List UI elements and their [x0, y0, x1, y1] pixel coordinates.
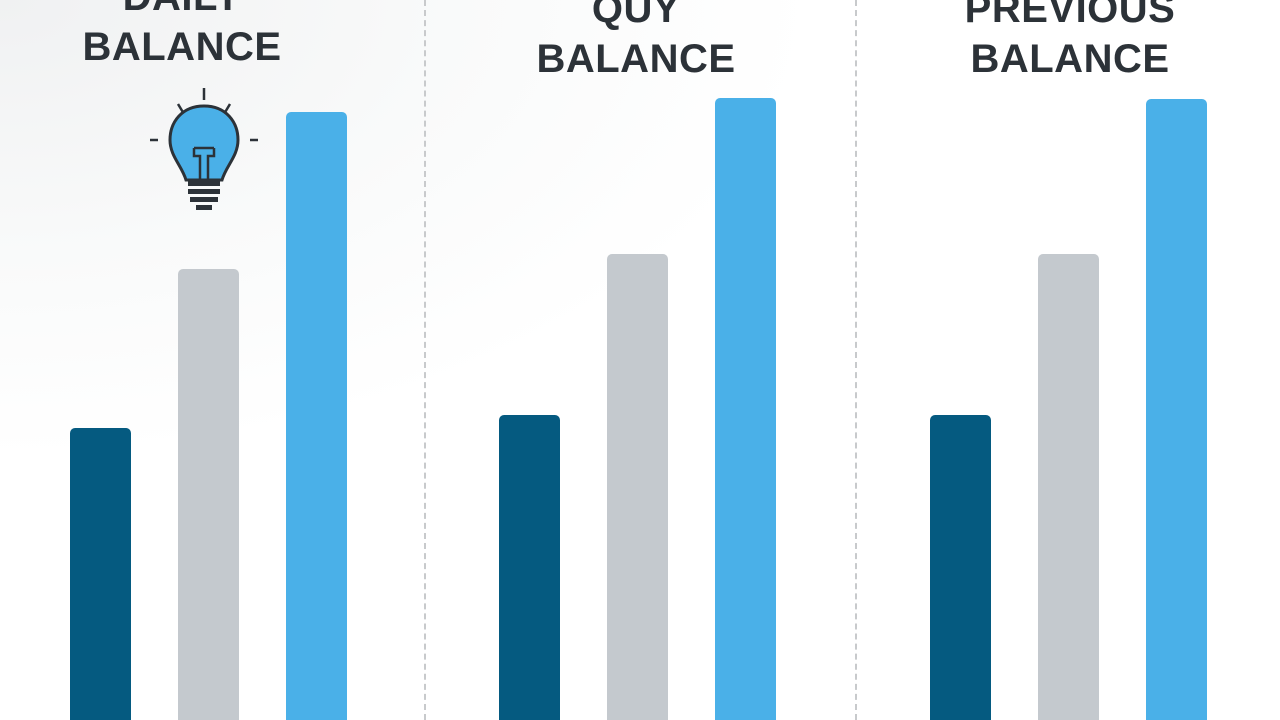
title: quy balance	[536, 0, 736, 81]
title: previous balance	[965, 0, 1175, 81]
chart: previous bars	[930, 99, 1207, 720]
chart: daily bars	[70, 112, 347, 720]
title: quy balance: BALANCE	[536, 37, 736, 81]
title: previous balance: BALANCE	[970, 37, 1170, 81]
icon: lightbulb	[150, 88, 258, 210]
chart: quy bars	[499, 98, 776, 720]
title: daily balance: BALANCE	[82, 25, 282, 69]
title: daily balance	[82, 0, 282, 69]
